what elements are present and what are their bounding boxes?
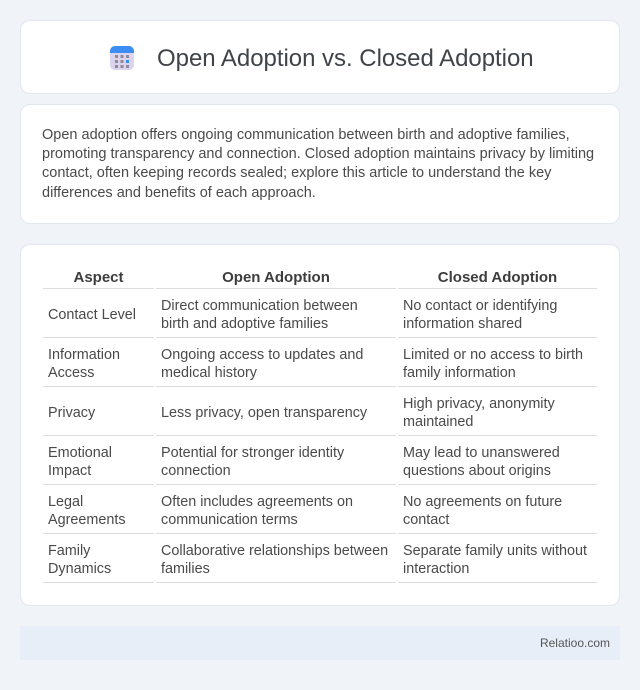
- row: Family Dynamics: Family: [48, 543, 90, 559]
- closed: information: family information: [403, 365, 516, 381]
- icon: calendar: [110, 46, 134, 70]
- closed: privacy: High privacy, anonymity: [403, 396, 555, 412]
- closed: emotional: [403, 445, 560, 479]
- open: information: medical history: [161, 365, 257, 381]
- footer credit: Relatioo.com: [540, 636, 610, 650]
- closed: information: [403, 347, 583, 381]
- row: Contact Level: Contact Level: [48, 307, 136, 323]
- open: contact: Direct communication between: [161, 298, 358, 314]
- open: emotional: connection: [161, 463, 231, 479]
- closed: legal: [403, 494, 562, 528]
- open: legal: Often includes agreements on: [161, 494, 353, 510]
- intro text: differences and benefits of each approach.: [42, 185, 316, 201]
- row: Legal Agreements: Legal: [48, 494, 83, 510]
- title: Open Adoption vs. Closed Adoption: [157, 45, 534, 72]
- open: privacy: Less privacy, open transparency: [161, 405, 367, 421]
- open: contact: birth and adoptive families: [161, 316, 328, 332]
- row: Information Access: [48, 347, 120, 381]
- row: Emotional Impact: Emotional: [48, 445, 112, 461]
- row: Information Access: Access: [48, 365, 94, 381]
- comparison table card: [20, 244, 620, 606]
- closed: family: interaction: [403, 561, 469, 577]
- intro text: [42, 127, 594, 201]
- intro text: Open adoption offers ongoing communication between birth and adoptive families,: [42, 127, 570, 143]
- closed: contact: information shared: [403, 316, 522, 332]
- row: Emotional Impact: Impact: [48, 463, 91, 479]
- closed: contact: No contact or identifying: [403, 298, 557, 314]
- open: family: Collaborative relationships between: [161, 543, 388, 559]
- header: Closed Adoption: Closed Adoption: [438, 269, 557, 286]
- intro text: contact, often keeping records sealed; explore this article to understand the key: [42, 165, 551, 181]
- row: Information Access: Information: [48, 347, 120, 363]
- row: Emotional Impact: [48, 445, 112, 479]
- open: information: Ongoing access to updates and: [161, 347, 363, 363]
- footer bar: [20, 626, 620, 660]
- open: emotional: Potential for stronger identity: [161, 445, 344, 461]
- closed: contact: [403, 298, 557, 332]
- title card: [20, 20, 620, 94]
- closed: privacy: maintained: [403, 414, 473, 430]
- intro text: promoting transparency and connection. Closed adoption maintains privacy by limiting: [42, 146, 594, 162]
- row: Family Dynamics: Dynamics: [48, 561, 111, 577]
- open: contact: [161, 298, 358, 332]
- header: Open Adoption: Open Adoption: [222, 269, 330, 286]
- closed: emotional: May lead to unanswered: [403, 445, 560, 461]
- open: family: families: [161, 561, 210, 577]
- row: Privacy: Privacy: [48, 405, 95, 421]
- open: information: [161, 347, 363, 381]
- row: Legal Agreements: Agreements: [48, 512, 126, 528]
- open: legal: communication terms: [161, 512, 298, 528]
- closed: legal: No agreements on future: [403, 494, 562, 510]
- row: Family Dynamics: [48, 543, 111, 577]
- closed: legal: contact: [403, 512, 449, 528]
- open: emotional: [161, 445, 344, 479]
- intro card: [20, 104, 620, 224]
- closed: family: [403, 543, 587, 577]
- closed: information: Limited or no access to birth: [403, 347, 583, 363]
- closed: emotional: questions about origins: [403, 463, 551, 479]
- header: Aspect: Aspect: [73, 269, 124, 286]
- open: legal: [161, 494, 353, 528]
- closed: privacy: [403, 396, 555, 430]
- closed: family: Separate family units without: [403, 543, 587, 559]
- open: family: [161, 543, 388, 577]
- row: Legal Agreements: [48, 494, 126, 528]
